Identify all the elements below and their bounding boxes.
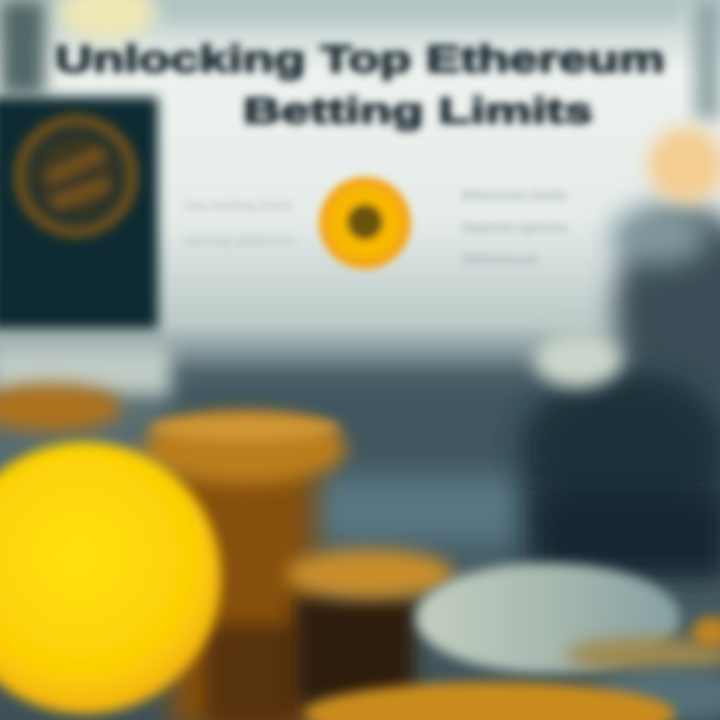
- coin stack: [0, 384, 347, 720]
- icon: orange coin on poster: [20, 120, 132, 232]
- coin: pale silver: [416, 563, 680, 673]
- coin: bottom gold: [305, 682, 675, 720]
- glow: peach orb: [648, 127, 720, 203]
- text block: left column: [185, 198, 295, 248]
- text block: right column: Withdrawal: [462, 251, 537, 267]
- glow: top-left light: [59, 0, 155, 40]
- text block: right column: [462, 187, 568, 267]
- title: Betting Limits: [243, 90, 593, 131]
- panel: dark poster: [0, 97, 158, 329]
- text block: right column: Deposit options: [462, 219, 568, 235]
- text block: left column: Key betting limits: [185, 198, 293, 213]
- text block: left column: and top platforms: [185, 233, 295, 248]
- coin stack: dark middle: [286, 549, 454, 705]
- title: Unlocking Top Ethereum: [55, 39, 665, 81]
- text block: right column: Ethereum limits: [462, 187, 567, 203]
- coin: lower right gold edge: [565, 617, 720, 720]
- icon: central gold coin: [319, 177, 411, 269]
- title: [55, 39, 665, 131]
- coin: large yellow: [0, 442, 221, 714]
